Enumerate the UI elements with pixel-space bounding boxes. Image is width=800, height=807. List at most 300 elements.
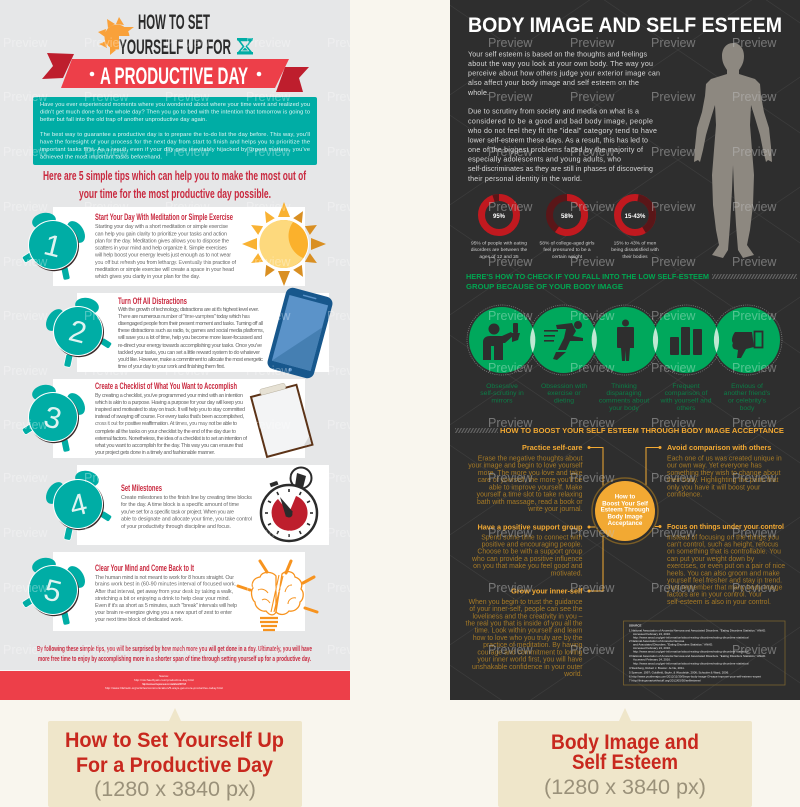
- text: Preview: [651, 361, 696, 375]
- sources box: 6 http://www.youtheraja.com/2012/11/30/Steps-body-image-/3-ways-improve-your-self-esteem-expert: [629, 674, 761, 678]
- text: Preview: [570, 643, 615, 657]
- tip 3 body: cross it out for positive reaffirmation. At times, you may not be able to: [95, 421, 237, 427]
- text: Preview: [327, 418, 372, 432]
- text: Preview: [84, 90, 129, 104]
- text: Preview: [3, 309, 48, 323]
- tip 2 body: There are numerous number of "time-vampires" today which has: [118, 314, 250, 320]
- green captions: body: [740, 405, 755, 412]
- icon: stopwatch: [261, 468, 317, 541]
- tip 1 body: can help you gain clarity to prioritize your tasks and action: [95, 232, 227, 238]
- green captions: disparaging: [606, 390, 642, 397]
- text: Preview: [165, 471, 210, 485]
- tip 5 body: brains work best in (60-90 minutes interval of focused work.: [95, 582, 236, 588]
- block: grow inner self: time. Look within yourself and learn: [475, 628, 583, 634]
- text: Preview: [570, 200, 615, 214]
- text: Preview: [165, 200, 210, 214]
- intro text: one of the biggest problems faced by the majority of: [468, 146, 643, 154]
- block: focus on things under control: heels. You can also groom and make: [667, 570, 780, 578]
- text: Preview: [165, 145, 210, 159]
- block: practice self-care: bath with massage, read a book or: [477, 499, 583, 506]
- central hub circle: [592, 478, 658, 544]
- block: grow inner self: unshakable confidence in your outer: [472, 664, 583, 671]
- intro text box: important tasks first. As a result, even if your day gets inevitably hijacked by urgent matters, you've: [40, 147, 310, 153]
- stat captions: 58% of college-aged girls: [540, 240, 595, 246]
- callout: body image caption: [498, 708, 752, 807]
- footer sources bar: Source:: [159, 674, 169, 678]
- warning sign circles: [467, 305, 782, 375]
- closing text: [37, 644, 312, 663]
- footer sources bar: http://www.lifehack.org/articles/communication/5-ways-get-more-productive-today.html: [105, 686, 223, 690]
- subheading: your time for the most productive day possible.: [79, 186, 271, 201]
- central hub circle: How to: [615, 494, 636, 500]
- subheading: [43, 168, 306, 201]
- block: practice self-care: able to improve yourself. Make: [489, 484, 583, 492]
- text: Preview: [488, 200, 533, 214]
- block: practice self-care: Practice self-care: [522, 443, 582, 452]
- green section heading: [466, 272, 797, 291]
- text: Preview: [3, 643, 48, 657]
- text: Preview: [3, 471, 48, 485]
- text: Preview: [732, 255, 777, 269]
- green captions: Thinking: [611, 383, 637, 390]
- text: Preview: [84, 418, 129, 432]
- text: Preview: [651, 200, 696, 214]
- tip 3 body: [94, 393, 247, 456]
- text: Preview: [327, 643, 372, 657]
- sources box: Accessed February 24, 2016.: [633, 658, 671, 662]
- tip 5 body: The human mind is not meant to work for 8 hours straight. Our: [95, 575, 234, 581]
- tip 4 body: [121, 495, 252, 530]
- icon: hourglass: [237, 38, 253, 54]
- intro text: whole.: [467, 89, 489, 97]
- text: Preview: [84, 255, 129, 269]
- text: Preview: [651, 471, 696, 485]
- tip 3 body: instead of swaying off course. For every tasks that's been accomplished,: [95, 414, 244, 420]
- icon: thumbs down: [732, 332, 762, 358]
- block: focus on things under control: yourself feel fresher and stay in trend.: [667, 578, 782, 584]
- text: Preview: [570, 36, 615, 50]
- text: Preview: [246, 200, 291, 214]
- block: grow inner self: your inner world first, you will have: [477, 656, 583, 664]
- sources box: Accessed February 24, 2016.: [633, 646, 671, 650]
- text: Preview: [3, 200, 48, 214]
- icon: clipboard: [249, 380, 314, 458]
- text: Preview: [732, 643, 777, 657]
- text: Preview: [488, 145, 533, 159]
- closing text: more free time to enjoy by accomplishing more in a shorter span of time through setting yourself up for a productive day.: [38, 654, 311, 663]
- block: grow inner self: practice of meditation. By having: [483, 642, 583, 649]
- text: Preview: [732, 145, 777, 159]
- icon: comparison bars: [670, 327, 702, 355]
- text: Preview: [732, 526, 777, 540]
- text: Preview: [570, 255, 615, 269]
- block: avoid comparison: confidence.: [667, 492, 702, 498]
- text: Preview: [327, 145, 372, 159]
- icon: alarm clock 2: [42, 296, 112, 368]
- sources box: 3 National Association of Anorexia Nervosa and Associated Disorders. "Eating Disorders Statistics." ANAD.: [629, 654, 766, 658]
- tip 5 body: [95, 575, 237, 623]
- panel: tip 5: [22, 552, 317, 631]
- block: practice self-care: more. The more you love and take: [478, 470, 583, 477]
- text: Preview: [651, 145, 696, 159]
- tip 2 body: you'd like. However, make a commitment to allocate the most energetic: [118, 357, 263, 363]
- text: Preview: [165, 90, 210, 104]
- green captions: self-scrutiny in: [480, 390, 524, 397]
- text: Preview: [84, 145, 129, 159]
- block: practice self-care: your image and begin to love yourself: [468, 462, 583, 470]
- block: focus on things under control: can't control, such as height, refocus: [667, 542, 779, 548]
- intro text: Your self esteem is based on the thoughts and feelings: [468, 50, 647, 58]
- icon: alarm clock 1: [22, 211, 89, 280]
- text: Preview: [165, 364, 210, 378]
- text: Preview: [732, 416, 777, 430]
- footer sources bar: http://www.entrepreneur.com/article/236718: [142, 682, 186, 686]
- text: Preview: [84, 643, 129, 657]
- central hub circle: Body Image: [607, 514, 643, 520]
- text: Preview: [327, 36, 372, 50]
- tip 2 body: With the growth of technology, distractions are at it's highest level ever.: [118, 307, 259, 313]
- text: Preview: [84, 200, 129, 214]
- tip 2 body: [117, 307, 264, 370]
- text: Preview: [246, 526, 291, 540]
- text: Preview: [732, 581, 777, 595]
- block: avoid comparison: only you have it will boost your: [667, 484, 761, 492]
- central hub circle: Boost Your Self: [602, 500, 649, 508]
- text: Preview: [84, 364, 129, 378]
- panel: productive day infographic: [0, 0, 350, 700]
- block: focus on things under control: can put your weight down by: [667, 556, 755, 563]
- text: Preview: [246, 418, 291, 432]
- text: Preview: [3, 418, 48, 432]
- block: focus on things under control: Focus on things under your control: [667, 522, 784, 531]
- sources box: http://www.anad.org/get-information/about-eating-disorders/eating-disorders-statistics/: [633, 636, 749, 640]
- text: Preview: [327, 471, 372, 485]
- text: Preview: [3, 255, 48, 269]
- intro text: who do not feel they fit the "ideal" category tend to have: [467, 127, 657, 135]
- green captions: Obsessive: [486, 383, 518, 390]
- intro text box: better but fall into the old trap of another unproductive day again.: [40, 117, 207, 123]
- intro text: also affect your body image and self esteem on the: [468, 79, 639, 87]
- block: practice self-care: care of yourself, the more you'll be: [478, 477, 583, 484]
- block: positive support group: Have a positive support group: [477, 522, 583, 532]
- text: Preview: [3, 36, 48, 50]
- text: Preview: [570, 90, 615, 104]
- tip 5 body: your brain re-energize giving you a new spurt of zest to enter: [95, 610, 232, 616]
- icon: alarm clock 1: 1: [41, 228, 65, 264]
- intro text: considered to be a good and bad body image, people: [468, 118, 653, 126]
- text: Preview: [651, 36, 696, 50]
- block: grow inner self: of your inner-self, people can see the: [469, 606, 583, 613]
- panel: body image infographic: [450, 0, 800, 700]
- intro text box: Have you ever experienced moments where you wondered about where your time went and realized you: [40, 102, 310, 108]
- block: positive support group: motivated.: [551, 570, 583, 578]
- donut: 58 percent: [550, 197, 585, 232]
- text: Preview: [246, 643, 291, 657]
- stat captions: their bodies: [622, 254, 648, 260]
- sources box: 5 Spencer. 1997; Goldfield, Boyle, & Woodside, 2006; Schooler & Ward, 2006.: [629, 670, 729, 674]
- text: Preview: [327, 90, 372, 104]
- icon: alarm clock 3: 3: [41, 400, 65, 436]
- block: focus on things under control: on something that is controllable. You: [667, 548, 781, 556]
- text: Preview: [84, 309, 129, 323]
- title line one: HOW TO SET: [138, 11, 210, 34]
- block: focus on things under control: factors are in your control. Your: [667, 592, 763, 598]
- tip 1 body: Starting your day with a short meditation or simple exercise: [95, 224, 228, 230]
- stat captions: 15% to 43% of men: [614, 240, 657, 246]
- text: Preview: [651, 581, 696, 595]
- intro text box: didn't get much done for the whole day? Then you go to bed with the intention that tomorrow is going to: [40, 110, 310, 116]
- block: focus on things under control: [667, 522, 785, 606]
- tip 1 heading: Start Your Day With Meditation or Simple Exercise: [95, 212, 233, 222]
- green captions: comparison of: [665, 390, 707, 397]
- green captions: mirrors: [491, 398, 513, 404]
- green captions: another friend's: [724, 390, 771, 397]
- text: Preview: [84, 526, 129, 540]
- callout: productive day caption: (1280 x 3840 px): [94, 778, 256, 801]
- green captions: others: [677, 405, 696, 412]
- text: Preview: [488, 361, 533, 375]
- intro text box: achieved the most important tasks beforehand.: [40, 154, 162, 160]
- block: focus on things under control: self-esteem is also in your control.: [667, 599, 771, 606]
- text: Preview: [165, 36, 210, 50]
- tip 4 heading: Set Milestones: [121, 483, 162, 493]
- block: positive support group: Choose to be with a support group: [477, 548, 583, 556]
- central hub circle: Esteem Through: [601, 506, 650, 514]
- text: Preview: [570, 309, 615, 323]
- block: avoid comparison: something they wish to change about: [667, 470, 781, 477]
- text: Preview: [488, 471, 533, 485]
- tip 2 body: will save you a lot of time, help you become more laser-focussed and: [117, 335, 262, 341]
- text: Preview: [327, 526, 372, 540]
- connector lines: [588, 446, 662, 592]
- stat captions: feel pressured to be a: [543, 247, 591, 253]
- intro text: lower self-esteem these days. As a result, this has led to: [468, 136, 648, 144]
- green captions: with yourself and: [659, 398, 712, 404]
- text: Preview: [570, 145, 615, 159]
- block: grow inner self: world.: [563, 671, 583, 678]
- text: Preview: [84, 36, 129, 50]
- text: Preview: [327, 581, 372, 595]
- text: Preview: [165, 418, 210, 432]
- footer sources bar: http://michaelhyatt.com/productive-day.html: [134, 678, 194, 682]
- tip 2 body: disengaged people from their present moment and tasks. Turning off all: [118, 321, 263, 327]
- sources box: and Associated Disorders. "Eating Disorders Statistics." ANAD.: [633, 642, 713, 646]
- icon: alarm clock 3: [22, 383, 89, 452]
- text: Preview: [327, 200, 372, 214]
- panel: tip 4: [42, 465, 329, 545]
- block: avoid comparison: Each one of us was created unique in: [667, 456, 782, 462]
- icon: alarm clock 5: [22, 556, 89, 625]
- tip 3 body: complete all the tasks on your checklist by the end of the day due to: [95, 429, 236, 435]
- tip 4 body: able to designate and allocate your time, you take control: [121, 516, 252, 522]
- text: Preview: [165, 309, 210, 323]
- green section heading: HERE'S HOW TO CHECK IF YOU FALL INTO THE LOW SELF-ESTEEM: [466, 272, 709, 281]
- intro text box: [33, 97, 317, 165]
- text: Preview: [570, 471, 615, 485]
- stat captions: 95% of people with eating: [471, 240, 527, 246]
- text: Preview: [651, 309, 696, 323]
- text: Preview: [165, 255, 210, 269]
- green captions: Envious of: [731, 383, 763, 390]
- text: Preview: [84, 471, 129, 485]
- text: Preview: [3, 90, 48, 104]
- green section heading: GROUP BECAUSE OF YOUR BODY IMAGE: [466, 282, 623, 291]
- icon: alarm clock 4: [42, 469, 112, 541]
- icon: running figure: [544, 321, 583, 360]
- sources box: http://www.anad.org/get-information/about-eating-disorders/eating-disorders-statistics/: [633, 662, 749, 666]
- callout: body image caption: Body Image and: [551, 731, 699, 754]
- icon: title sun: [98, 17, 134, 56]
- intro text: [467, 50, 660, 183]
- block: positive support group: who can provide a positive influence: [471, 556, 583, 563]
- text: Preview: [651, 255, 696, 269]
- block: avoid comparison: their body. Highlighting the parts that: [667, 477, 779, 484]
- text: Preview: [84, 581, 129, 595]
- text: Preview: [3, 581, 48, 595]
- central hub circle: Acceptance: [608, 520, 643, 527]
- banner text: A PRODUCTIVE DAY: [100, 63, 248, 90]
- stat captions: being dissatisfied with: [611, 247, 659, 253]
- tip 2 body: re-direct your energy towards accomplishing your tasks. Once you've: [118, 343, 262, 349]
- intro text: about the way you look at your own body. The way you: [468, 60, 653, 68]
- block: grow inner self: Grow your inner-self: [511, 586, 583, 596]
- text: Preview: [488, 255, 533, 269]
- icon: brain light bulb: [238, 561, 317, 630]
- icon: alarm clock 5: 5: [41, 573, 65, 609]
- block: focus on things under control: exercises, or even put on a pair of nice: [667, 563, 785, 570]
- block: positive support group: positive and encouraging people.: [482, 542, 583, 548]
- callout: productive day caption: [48, 708, 302, 807]
- block: practice self-care: yourself a time slot to take relaxing: [477, 492, 583, 498]
- text: Preview: [165, 581, 210, 595]
- text: Preview: [246, 145, 291, 159]
- tip 1 body: meditation or simple exercise will create a space in your head: [95, 267, 234, 273]
- text: Preview: [165, 643, 210, 657]
- block: avoid comparison: our own way. Yet everyone has: [667, 462, 762, 470]
- tip 1 body: you off but refresh you from lethargy. Eventually this practice of: [95, 260, 236, 266]
- icon: sun: [242, 202, 326, 286]
- green captions: your body: [609, 405, 640, 412]
- tip 3 body: inspired and motivated to stay on track. It will help you to stay committed: [95, 407, 245, 413]
- text: Preview: [246, 90, 291, 104]
- sources box: Accessed February 24, 2016.: [633, 632, 671, 636]
- stat captions: ages of 12 and 25: [479, 254, 519, 260]
- subheading: Here are 5 simple tips which can help you to make the most out of: [43, 168, 306, 183]
- tip 5 body: Even if it's as short as 5 minutes, such "break" intervals will help: [95, 603, 237, 609]
- tip 5 body: After that interval, get away from your desk by taking a walk,: [95, 589, 234, 595]
- text: Preview: [488, 36, 533, 50]
- block: grow inner self: courage and commitment to loving: [477, 650, 583, 656]
- title line two: YOURSELF UP FOR: [119, 36, 231, 59]
- tip 5 body: stretching a bit or enjoying a drink to help clear your mind.: [95, 596, 230, 602]
- icon: alarm clock 2: 2: [66, 314, 90, 350]
- intro text: especially adolescents and young adults, who: [468, 156, 621, 164]
- tip 1 body: will help boost your energy levels just enough as to not wear: [94, 252, 231, 258]
- block: positive support group: [471, 522, 583, 578]
- block: focus on things under control: Instead of focusing on the things you: [667, 534, 779, 542]
- stat captions: disorders are between the: [471, 247, 528, 253]
- block: avoid comparison: [667, 443, 782, 498]
- text: Preview: [488, 90, 533, 104]
- sources box: 2 National Association of Anorexia Nervosa: [629, 639, 685, 643]
- intro text: self-discriminates as they are still in phases of discovering: [468, 165, 653, 173]
- intro text: their personal identity in the world.: [468, 175, 582, 183]
- tip 1 body: plan for the day. Meditation gives allows you to dispose the: [95, 238, 229, 244]
- text: Preview: [246, 364, 291, 378]
- donut: 95 percent: 95%: [493, 214, 506, 220]
- footer sources bar: [0, 670, 350, 700]
- tip 2 body: these distractions such as radio, tv, games and social media platforms,: [118, 328, 264, 334]
- text: Preview: [570, 581, 615, 595]
- tip 1 body: which gives you clarity in your plan for the day.: [94, 274, 200, 280]
- tip 3 body: By creating a checklist, you've programmed your mind with an intention: [95, 393, 243, 399]
- tip 3 body: what you want to accomplish for the day. This way you can ensure that: [94, 443, 244, 449]
- text: Preview: [488, 643, 533, 657]
- tip 3 body: external factors. Nonetheless, the idea of a checklist is to set an intention of: [95, 436, 247, 442]
- block: grow inner self: [466, 586, 583, 678]
- text: Preview: [651, 90, 696, 104]
- sources box: 1 National Association of Anorexia Nervosa and Associated Disorders. "Eating Disorders Statistics." ANAD.: [629, 628, 766, 632]
- sources box: 4 Steinberg, Robert J. Boston: Je Ne, 2011.: [629, 666, 685, 670]
- donut: 15 to 43 percent: [618, 198, 652, 232]
- sources box: http://www.anad.org/get-information/about-eating-disorders/eating-disorders-statistics/: [633, 650, 749, 654]
- tip 2 heading: Turn Off All Distractions: [118, 296, 187, 306]
- banner ribbon: [42, 53, 309, 92]
- block: grow inner self: loveliness and the creativity in you –: [472, 614, 583, 620]
- panel: tip 2: [42, 286, 334, 380]
- text: Preview: [732, 361, 777, 375]
- text: Preview: [327, 255, 372, 269]
- tip 3 heading: Create a Checklist of What You Want to Accomplish: [95, 381, 237, 391]
- title: BODY IMAGE AND SELF ESTEEM: [468, 14, 782, 37]
- green captions: Obsession with: [541, 383, 587, 390]
- panel: tip 3: [22, 379, 314, 458]
- block: grow inner self: When you begin to trust the guidance: [469, 599, 583, 606]
- text: Preview: [732, 36, 777, 50]
- text: Preview: [327, 364, 372, 378]
- green captions: [480, 383, 771, 412]
- text: Preview: [488, 416, 533, 430]
- block: practice self-care: [468, 443, 583, 513]
- green captions: Frequent: [672, 383, 700, 390]
- text: Preview: [732, 471, 777, 485]
- callout: productive day caption: For a Productive Day: [76, 754, 273, 777]
- icon: standing person: [617, 320, 634, 361]
- intro text box: have the foresight of your process for the next day from start to finish and helps you to prioritize the: [40, 140, 310, 146]
- human silhouette: [694, 43, 772, 258]
- callout: body image caption: (1280 x 3840 px): [544, 776, 706, 799]
- block: focus on things under control: Just remember that many body image: [667, 584, 783, 592]
- text: Preview: [3, 145, 48, 159]
- tip 1 body: [94, 224, 236, 280]
- closing text: By following these simple tips, you will be surprised by how much more you will get done in a day. Ultimately, you will have: [37, 644, 312, 653]
- block: avoid comparison: Avoid comparison with others: [667, 443, 771, 452]
- text: Preview: [651, 526, 696, 540]
- block: positive support group: on you that make you feel good and: [473, 563, 583, 570]
- text: Preview: [246, 581, 291, 595]
- intro text: Due to scrutiny from society and media on what is a: [468, 108, 639, 116]
- tip 4 body: you've set for a specific task or project. When you are: [121, 510, 234, 516]
- donut: 15 to 43 percent: 15-43%: [625, 214, 646, 220]
- text: Preview: [246, 36, 291, 50]
- text: Preview: [651, 416, 696, 430]
- intro text box: The best way to guarantee a productive day is to prepare the to-do list the day before. This way, you'll: [40, 132, 310, 138]
- green captions: exercise or: [547, 390, 581, 397]
- tip 1 body: scatters in your mind and help organize it. Simple exercises: [95, 246, 227, 252]
- text: Preview: [246, 471, 291, 485]
- sources box: SOURCE: [629, 624, 641, 628]
- green captions: or celebrity's: [728, 398, 767, 404]
